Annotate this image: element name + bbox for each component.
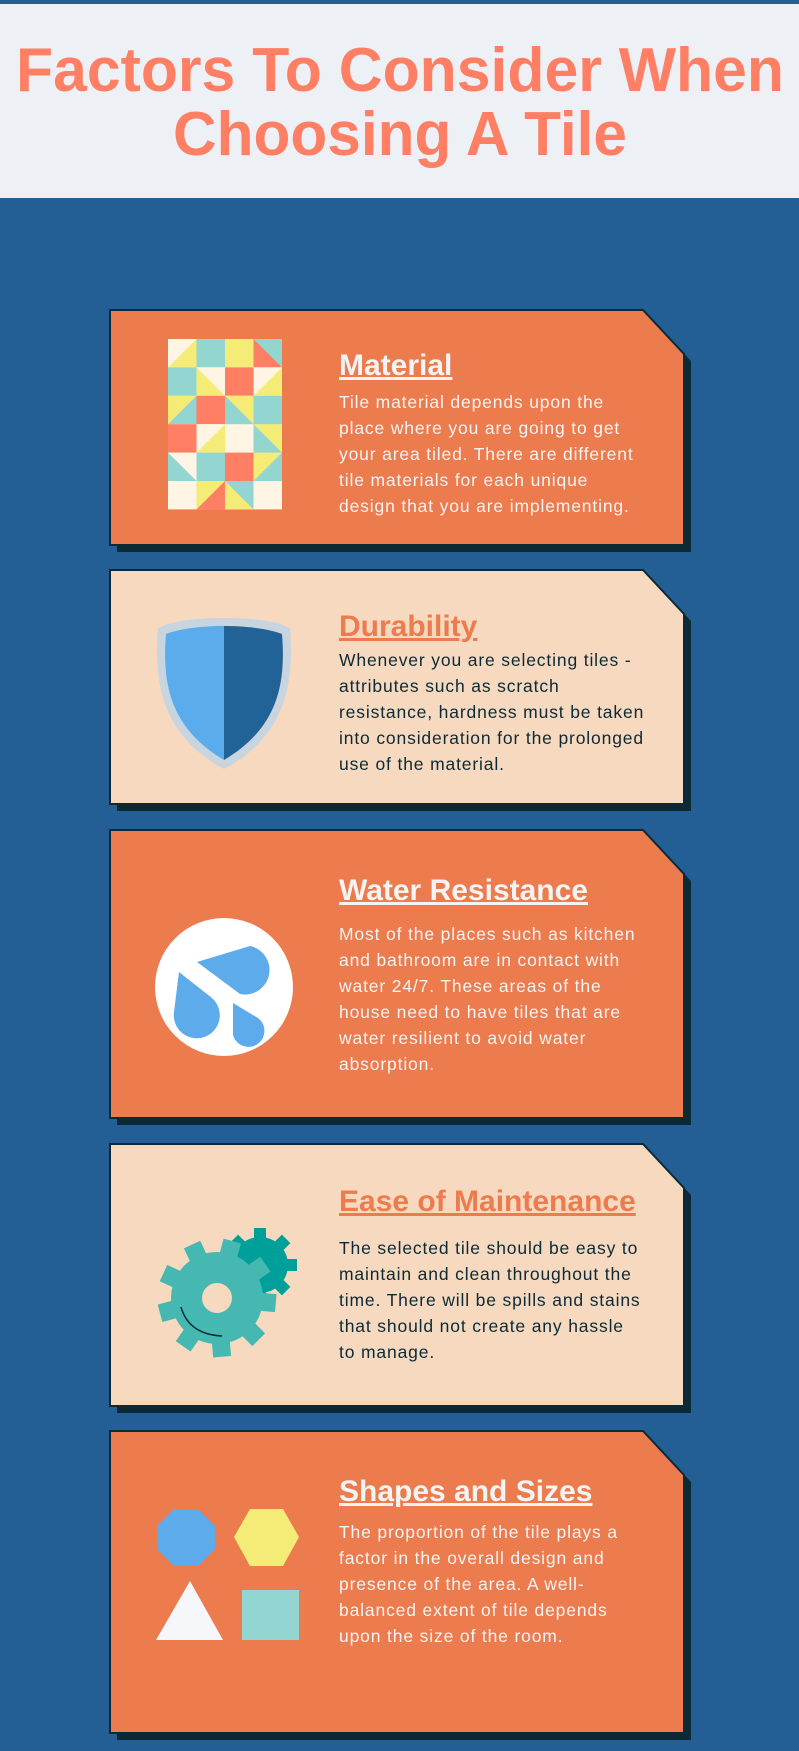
title: Factors To Consider When (16, 36, 784, 105)
icon: shield (157, 618, 291, 769)
text block: durability (339, 650, 644, 774)
text block: ease of maintenance: time. There will be spills and stains (339, 1290, 641, 1310)
text block: ease of maintenance: that should not create any hassle (339, 1316, 624, 1336)
text block: ease of maintenance: maintain and clean throughout the (339, 1264, 632, 1284)
text block: shapes and sizes: factor in the overall design and (339, 1548, 605, 1568)
text block: water resistance: water 24/7. These areas of the (338, 976, 602, 996)
text block: durability: resistance, hardness must be taken (339, 702, 644, 722)
title: Choosing A Tile (173, 100, 627, 169)
text block: water resistance (338, 924, 635, 1074)
text block: material: place where you are going to get (339, 418, 620, 438)
text block: material (339, 392, 634, 516)
heading: material: Material (339, 349, 452, 382)
text block: ease of maintenance: The selected tile should be easy to (339, 1238, 638, 1258)
text block: material: Tile material depends upon the (339, 392, 604, 412)
heading: ease of maintenance: Ease of Maintenance (339, 1185, 636, 1218)
panel: durability (110, 570, 691, 811)
panel: material (110, 310, 691, 552)
text block: material: design that you are implementing. (339, 496, 630, 516)
text block: material: your area tiled. There are different (339, 444, 634, 464)
text block: shapes and sizes: balanced extent of tile depends (339, 1600, 608, 1620)
panel: water resistance (110, 830, 691, 1125)
title (16, 36, 784, 169)
icon: water drops (155, 918, 293, 1056)
text block: durability: into consideration for the prolonged (339, 728, 644, 748)
text block: shapes and sizes (339, 1522, 618, 1646)
text block: shapes and sizes: upon the size of the room. (339, 1626, 563, 1646)
text block: water resistance: and bathroom are in contact with (339, 950, 620, 970)
text block: durability: attributes such as scratch (339, 676, 560, 696)
text block: durability: Whenever you are selecting tiles - (339, 650, 632, 670)
panel: ease of maintenance (110, 1144, 691, 1413)
icon: tile mosaic (168, 339, 282, 509)
text block: durability: use of the material. (339, 754, 505, 774)
heading: shapes and sizes: Shapes and Sizes (339, 1475, 592, 1508)
text block: shapes and sizes: presence of the area. A well- (339, 1574, 584, 1594)
text block: water resistance: Most of the places such as kitchen (339, 924, 635, 944)
text block: ease of maintenance (339, 1238, 641, 1362)
panel: shapes and sizes (110, 1431, 691, 1740)
text block: shapes and sizes: The proportion of the tile plays a (339, 1522, 618, 1542)
heading: water resistance: Water Resistance (339, 874, 588, 907)
text block: material: tile materials for each unique (339, 470, 588, 490)
text block: water resistance: house need to have tiles that are (339, 1002, 621, 1022)
heading: durability: Durability (339, 610, 478, 643)
text block: water resistance: absorption. (339, 1054, 435, 1074)
icon: shapes (156, 1509, 299, 1640)
text block: water resistance: water resilient to avoid water (338, 1028, 586, 1048)
icon: gears (144, 1226, 297, 1370)
text block: ease of maintenance: to manage. (339, 1342, 435, 1362)
header band (0, 4, 799, 198)
